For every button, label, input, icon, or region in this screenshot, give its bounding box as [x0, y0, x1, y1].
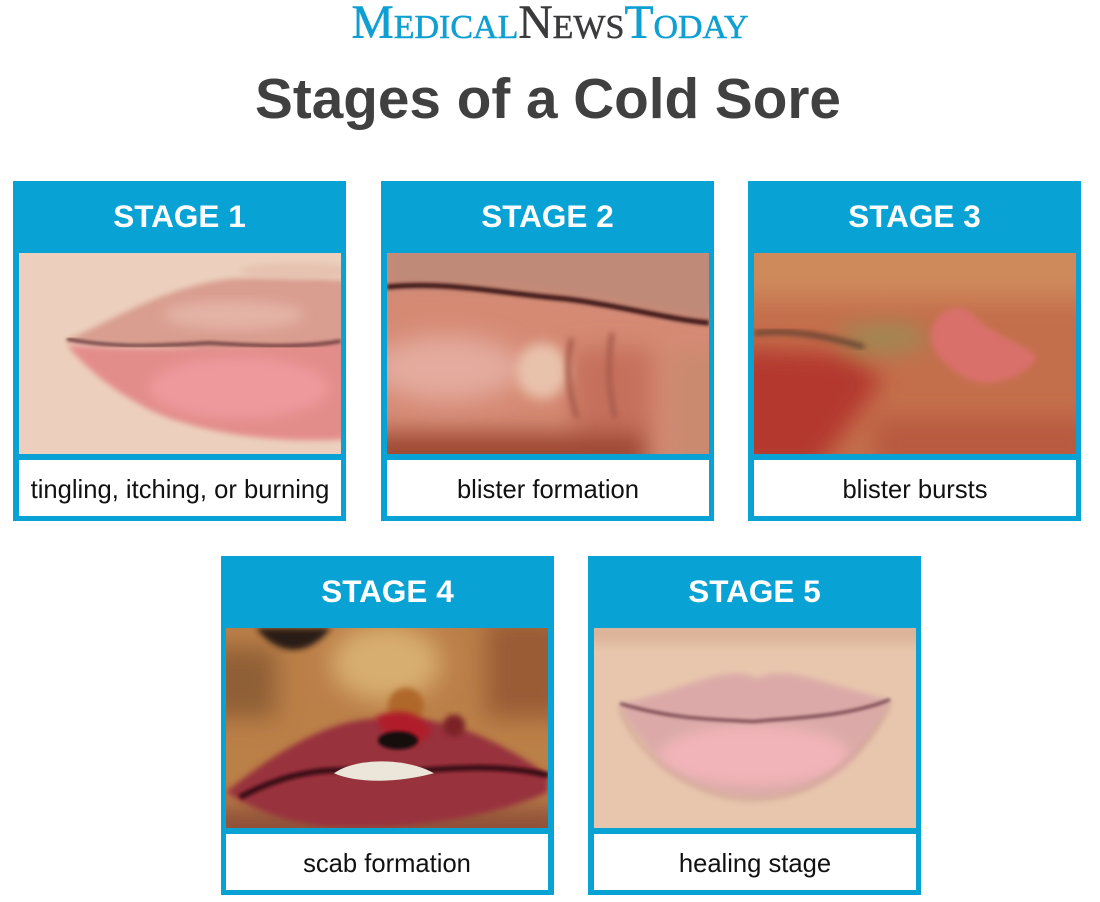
caption: stage 1	[19, 460, 341, 516]
panel: stage 4	[221, 556, 554, 895]
panel: stage 2	[381, 181, 714, 521]
panel: stage 1	[13, 181, 346, 521]
photo: healed lips	[594, 628, 916, 828]
heading: stage 4: STAGE 4	[321, 573, 454, 609]
panel: stage 3	[748, 181, 1081, 521]
photo: scab on lip	[226, 628, 548, 828]
caption: stage 4: scab formation	[303, 850, 471, 878]
caption: stage 2	[387, 460, 709, 516]
caption: stage 1: tingling, itching, or burning	[31, 476, 329, 504]
caption: stage 3: blister bursts	[842, 476, 988, 504]
heading: stage 5: STAGE 5	[688, 573, 821, 609]
panel: stage 5	[588, 556, 921, 895]
caption: stage 5	[594, 834, 916, 890]
caption: stage 4	[226, 834, 548, 890]
title: Stages of a Cold Sore	[255, 68, 841, 131]
caption: stage 2: blister formation	[457, 476, 639, 504]
heading: stage 1: STAGE 1	[113, 198, 246, 234]
heading: stage 2: STAGE 2	[481, 198, 614, 234]
heading: stage 3: STAGE 3	[848, 198, 981, 234]
caption: stage 3	[754, 460, 1076, 516]
photo: blister on lip	[387, 253, 709, 454]
photo: burst blister	[754, 253, 1076, 454]
photo: lips, stage 1	[19, 253, 341, 454]
caption: stage 5: healing stage	[679, 850, 831, 878]
